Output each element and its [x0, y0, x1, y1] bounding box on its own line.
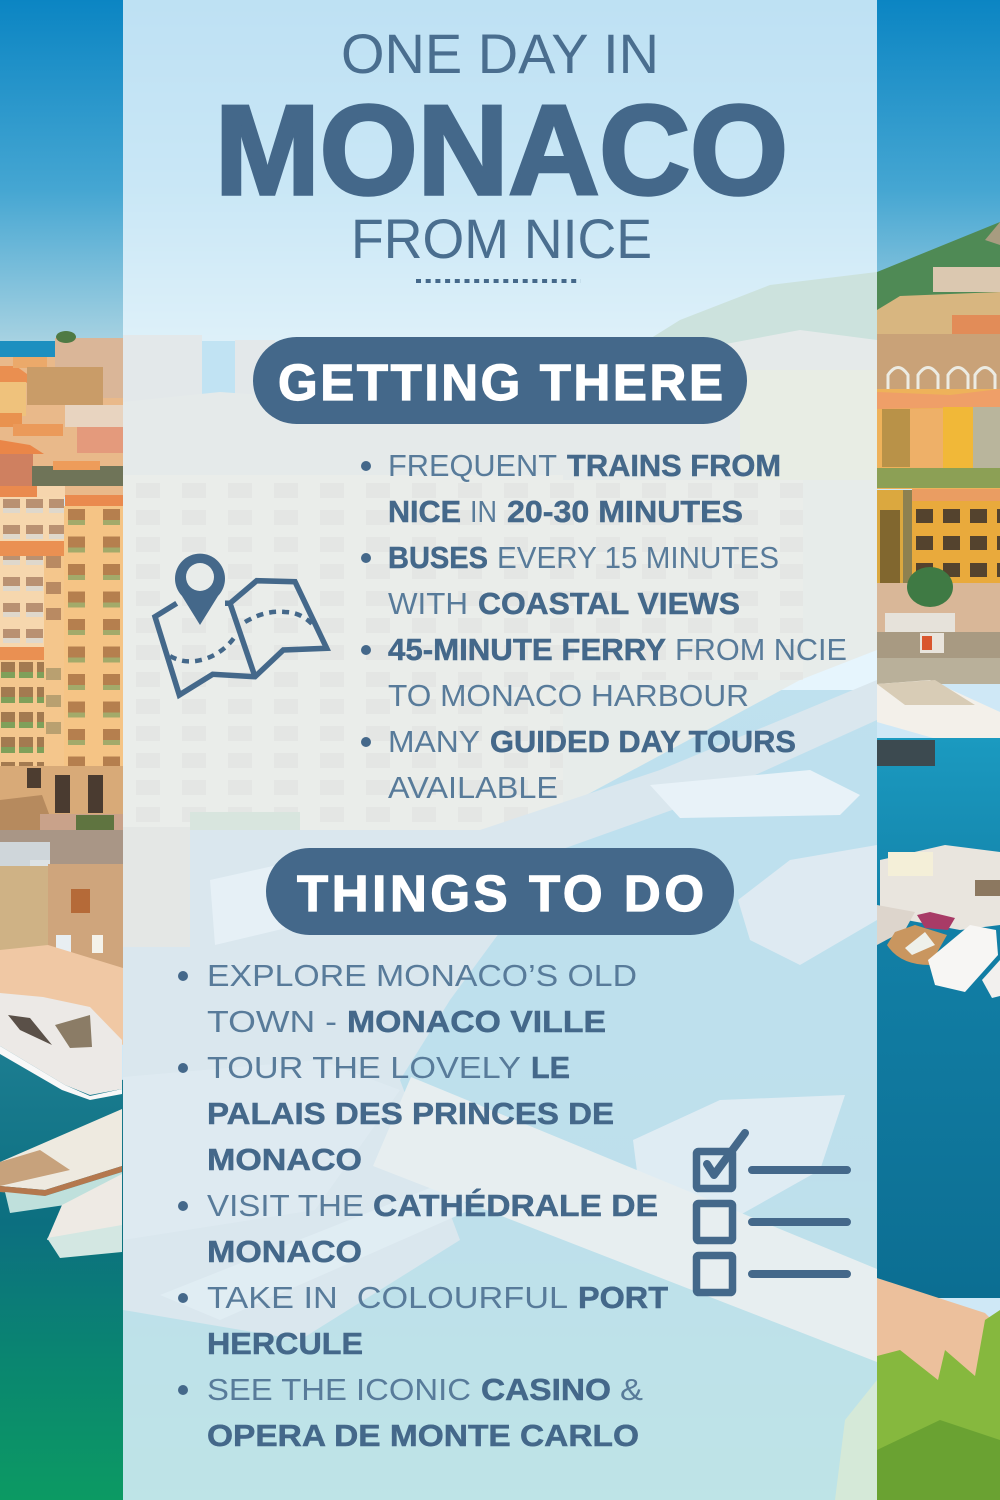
list: things to do: MONACO	[207, 1234, 362, 1269]
list: things to do: TOUR THE LOVELY	[207, 1050, 521, 1085]
right side: water	[877, 738, 1000, 1298]
list: getting there: IN	[470, 494, 497, 529]
list: getting there	[361, 448, 847, 805]
icon: checklist	[696, 1133, 847, 1292]
distant hill	[640, 222, 1000, 400]
heading pill: things to do	[266, 848, 734, 935]
central water	[123, 690, 877, 1500]
right side: moored boats	[877, 845, 1000, 998]
left side: water	[0, 1040, 123, 1500]
list: getting there: NICE	[388, 494, 461, 529]
list: things to do: VISIT THE	[207, 1188, 364, 1223]
bullet points	[361, 461, 371, 747]
list: things to do: SEE THE ICONIC	[207, 1372, 471, 1407]
title: FROM NICE	[351, 207, 652, 270]
left side: street	[0, 795, 123, 872]
heading pill: getting there	[253, 337, 747, 424]
left side: rocks and stone tower	[0, 864, 123, 969]
list: things to do: &	[620, 1372, 643, 1407]
central apartment block	[123, 475, 563, 830]
list: getting there: 20-30 MINUTES	[507, 494, 743, 529]
list: things to do: PORT	[578, 1280, 668, 1315]
list: things to do: CATHÉDRALE DE	[373, 1188, 658, 1223]
list: getting there: TRAINS FROM	[567, 448, 781, 483]
left side: moored boats	[0, 993, 122, 1258]
list: things to do: EXPLORE MONACO’S OLD	[207, 958, 637, 993]
left side: apartment block	[0, 486, 123, 814]
list: things to do: MONACO	[207, 1142, 362, 1177]
list: getting there: 45-MINUTE FERRY	[388, 632, 666, 667]
right side: dark boat	[877, 740, 935, 766]
right side: arches	[888, 368, 995, 391]
right side: plaza and marina	[877, 567, 1000, 740]
list: getting there: FREQUENT	[388, 448, 557, 483]
list: things to do: TAKE IN COLOURFUL	[207, 1280, 568, 1315]
list: things to do: CASINO	[481, 1372, 611, 1407]
heading pill: things to do: THINGS TO DO	[297, 865, 704, 922]
distant towers	[123, 335, 275, 405]
list: things to do: OPERA DE MONTE CARLO	[207, 1418, 639, 1453]
heading pill: getting there: GETTING THERE	[278, 354, 723, 411]
dotted divider	[416, 279, 581, 283]
left side: quay	[0, 945, 123, 1045]
list: things to do: TOWN -	[207, 1004, 337, 1039]
list: things to do: LE	[531, 1050, 570, 1085]
list: things to do: MONACO VILLE	[347, 1004, 606, 1039]
list: getting there: MANY	[388, 724, 480, 759]
list: getting there: EVERY 15 MINUTES	[497, 540, 779, 575]
list: things to do: PALAIS DES PRINCES DE	[207, 1096, 614, 1131]
list: getting there: BUSES	[388, 540, 488, 575]
central marina	[123, 680, 877, 1500]
list: getting there: TO MONACO HARBOUR	[388, 678, 749, 713]
list: getting there: FROM NCIE	[675, 632, 847, 667]
list: getting there: COASTAL VIEWS	[478, 586, 740, 621]
title	[215, 22, 788, 270]
list: getting there: AVAILABLE	[388, 770, 558, 805]
bullet points	[178, 971, 188, 1395]
translucent central panel	[123, 0, 877, 1500]
icon: map with pin	[155, 554, 327, 695]
list: things to do: HERCULE	[207, 1326, 363, 1361]
list: things to do	[178, 958, 668, 1453]
right side: quay	[877, 1278, 992, 1380]
distant sea	[0, 341, 260, 401]
right side: foliage	[877, 1310, 1000, 1500]
title: ONE DAY IN	[341, 22, 659, 85]
central far buildings	[123, 330, 877, 500]
right side: terracotta and yellow blocks	[877, 389, 1000, 605]
list: getting there: WITH	[388, 586, 468, 621]
title: MONACO	[215, 79, 788, 221]
left side: roofs and upper buildings	[0, 331, 123, 497]
list: getting there: GUIDED DAY TOURS	[490, 724, 796, 759]
right side: hill buildings	[877, 222, 1000, 394]
sky	[0, 0, 1000, 345]
